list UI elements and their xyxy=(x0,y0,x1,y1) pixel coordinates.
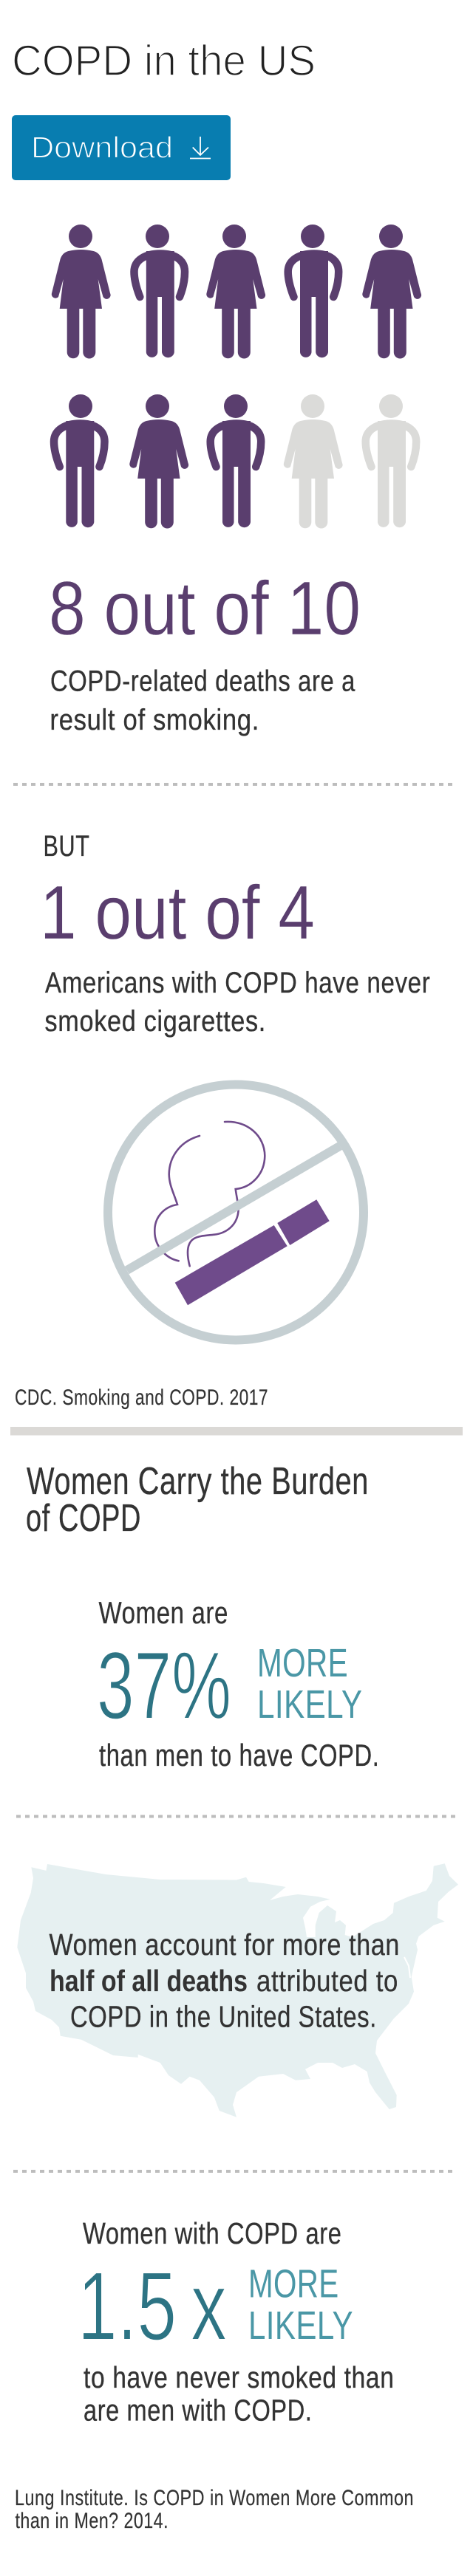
source: CDC: CDC. Smoking and COPD. 2017 xyxy=(15,1385,268,1410)
text: COPD-related deaths: result of smoking. xyxy=(50,704,259,736)
text: half of all deaths: half of all deaths xyxy=(50,1964,248,1998)
label: more likely xyxy=(257,1641,362,1727)
icon: download arrow xyxy=(190,137,211,158)
person 9: woman grey xyxy=(284,394,343,529)
label: more likely: LIKELY xyxy=(257,1682,362,1727)
map: United States xyxy=(17,1863,458,2117)
stat block: 37% more likely: than men to have COPD. xyxy=(99,1738,380,1772)
download button: Download xyxy=(31,130,173,164)
stat: 8 out of 10: 8 out of 10 xyxy=(49,566,361,651)
text: Americans with COPD: smoked cigarettes. xyxy=(44,1005,266,1038)
source: Lung Institute xyxy=(15,2486,414,2533)
person 5: woman xyxy=(362,225,421,359)
heading: Women Carry the Burden xyxy=(26,1460,369,1540)
number: 1.5 x: x xyxy=(191,2252,227,2360)
heading: Women Carry the Burden: Women Carry the Burden xyxy=(27,1460,369,1503)
pictogram: 8 of 10 people in purple xyxy=(52,225,421,529)
person 8: man xyxy=(211,394,261,527)
title: COPD in the US xyxy=(12,37,316,85)
text: half of all deaths: COPD in the United States. xyxy=(70,2000,377,2034)
person 4: man xyxy=(288,225,338,357)
text: COPD-related deaths xyxy=(50,665,355,736)
smoke xyxy=(154,1122,265,1266)
icon: no smoking xyxy=(108,1084,364,1340)
text: COPD-related deaths: COPD-related deaths are a xyxy=(50,665,355,697)
label: more likely: LIKELY xyxy=(248,2303,353,2348)
person 10: man grey xyxy=(366,394,416,527)
person 7: woman xyxy=(129,394,188,529)
cigarette xyxy=(175,1199,330,1305)
stat block: 1.5x more likely: to have never smoked than xyxy=(84,2360,395,2394)
person 2: man xyxy=(135,225,185,357)
download button xyxy=(12,115,231,180)
text: Americans with COPD xyxy=(44,967,430,1038)
text: half of all deaths xyxy=(49,1928,400,2034)
person 3: woman xyxy=(206,225,265,359)
text: half of all deaths: Women account for more than xyxy=(49,1928,400,1962)
text: BUT: BUT xyxy=(43,830,90,863)
label: more likely: MORE xyxy=(248,2262,338,2306)
stat block: 37% more likely: Women are xyxy=(99,1595,228,1630)
stat block: 1.5x more likely: are men with COPD. xyxy=(84,2393,312,2427)
number: 37%: 37% xyxy=(97,1631,231,1739)
stat block: 1.5x more likely: Women with COPD are xyxy=(83,2216,341,2250)
number: 1.5 x: 1.5 xyxy=(78,2252,177,2360)
label: more likely: MORE xyxy=(257,1641,348,1685)
heading: Women Carry the Burden: of COPD xyxy=(26,1497,141,1540)
stat block: 1.5x more likely xyxy=(78,2216,395,2427)
prohibition ring xyxy=(108,1084,364,1340)
stat block: 37% more likely xyxy=(97,1595,380,1772)
source: Lung Institute: than in Men? 2014. xyxy=(15,2509,169,2533)
stat: 1 out of 4: 1 out of 4 xyxy=(40,870,315,955)
text: half of all deaths: attributed to xyxy=(256,1964,398,1998)
person 6: man xyxy=(54,394,105,527)
person 1: woman xyxy=(52,225,111,359)
label: more likely xyxy=(248,2262,353,2348)
